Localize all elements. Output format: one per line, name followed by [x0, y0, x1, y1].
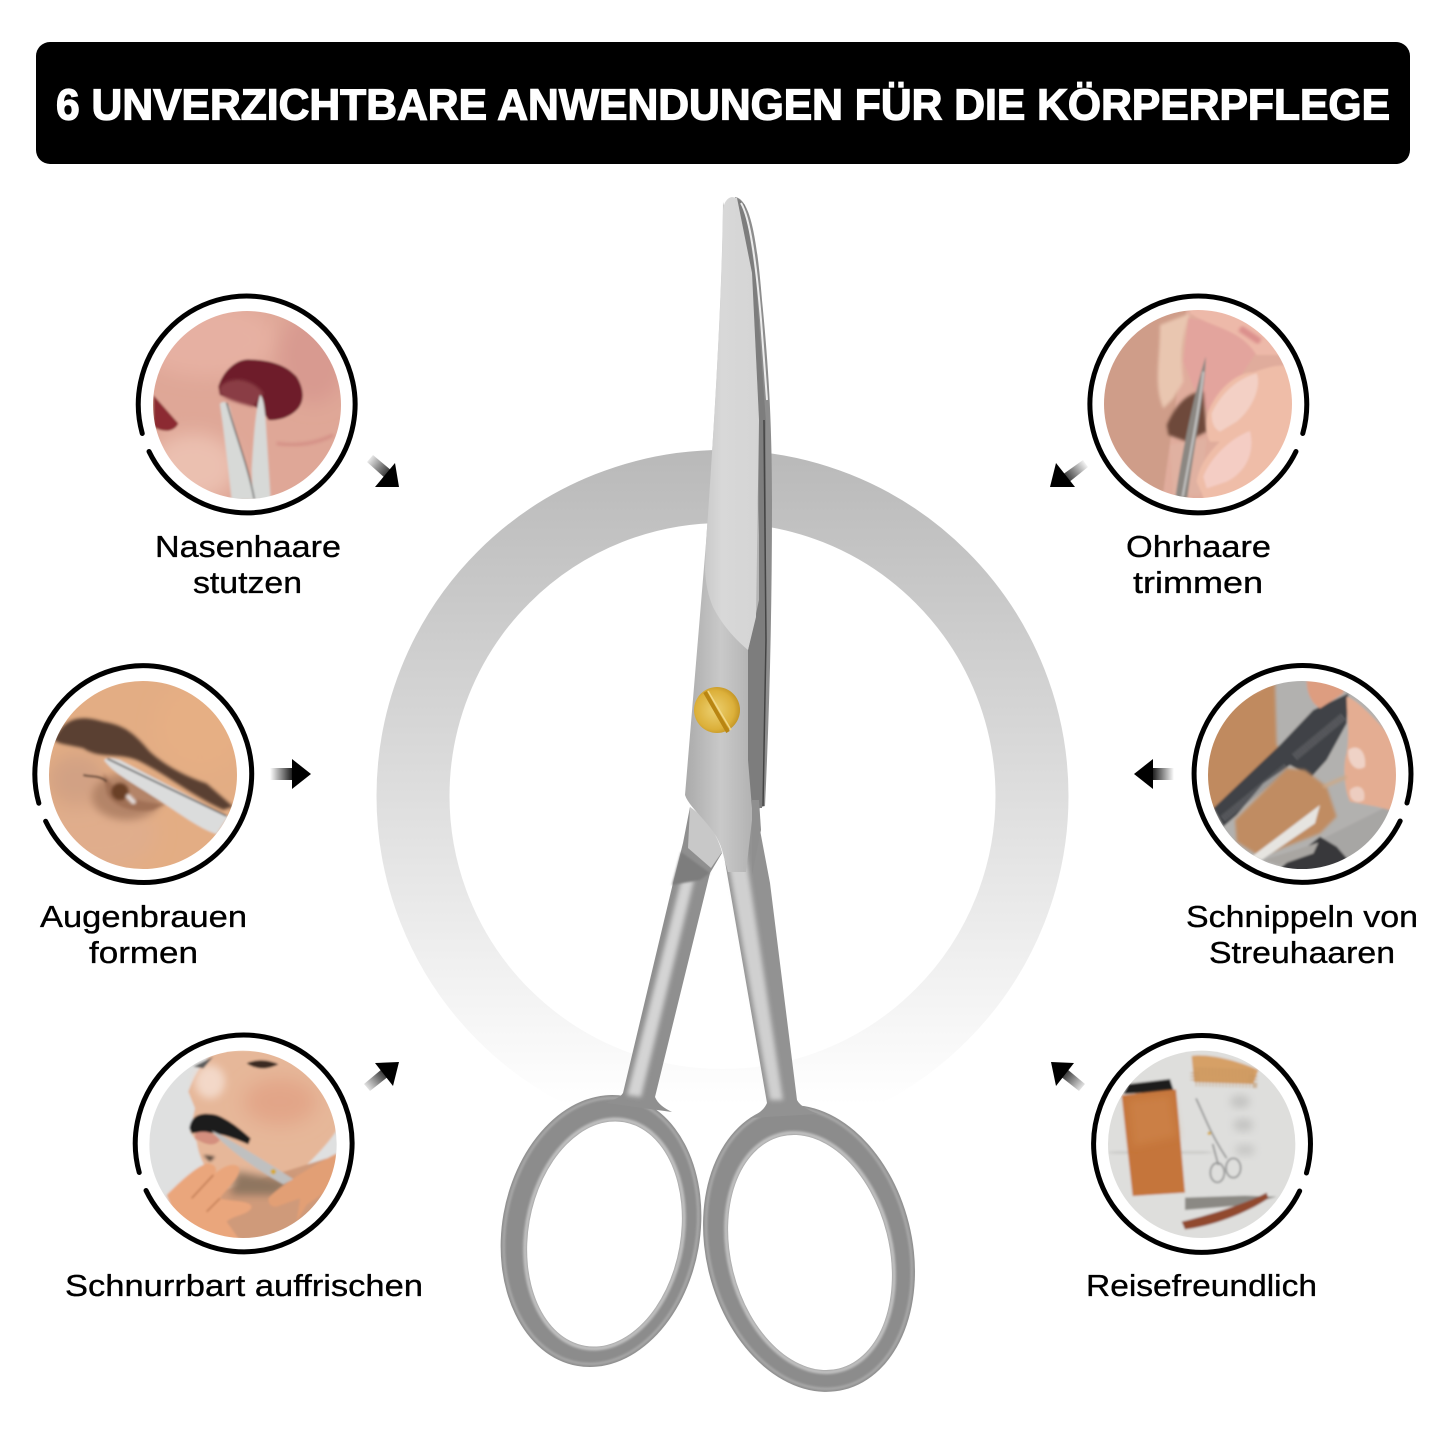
gold screw [694, 687, 740, 733]
label: trimmen [1133, 565, 1263, 600]
hollow-ground blade [705, 197, 759, 650]
wooden comb [1192, 1055, 1258, 1084]
label: Streuhaaren [1209, 935, 1395, 970]
label: Reisefreundlich [1086, 1268, 1317, 1303]
panel: Augenbrauen [35, 666, 311, 970]
right shank [715, 800, 818, 1118]
panel: Schnurrbart auffrischen [65, 1035, 423, 1303]
title text: 6 UNVERZICHTBARE ANWENDUNGEN FÜR DIE KÖRPERPFLEGE [56, 80, 1390, 130]
blade bevel [737, 198, 766, 808]
photo: mustache [148, 1050, 340, 1245]
label [1186, 899, 1418, 970]
small scissors [1196, 1098, 1241, 1182]
razor handle [1182, 1193, 1268, 1229]
left hand [167, 1163, 252, 1245]
scissor blades [1252, 805, 1320, 860]
arrow [1051, 1062, 1085, 1091]
arrow [364, 1062, 399, 1091]
neck [220, 1158, 327, 1245]
photo: nose [153, 311, 341, 499]
pivot body [685, 202, 763, 872]
label: stutzen [193, 565, 302, 600]
comb [1213, 693, 1348, 827]
right handle ring [674, 1082, 944, 1415]
label: formen [89, 935, 198, 970]
panel: Ohrhaare [1050, 296, 1307, 600]
ring [1094, 1035, 1310, 1252]
panel: Reisefreundlich [1051, 1035, 1317, 1303]
title bar [36, 42, 1410, 164]
photo: beard and comb [1208, 681, 1396, 869]
label [1126, 529, 1271, 600]
panel: Schnippeln von Streuhaaren [1134, 665, 1418, 970]
ring [1090, 296, 1307, 513]
label: Ohrhaare [1126, 529, 1271, 564]
upper beard [1208, 684, 1280, 810]
scissor blades [220, 402, 255, 500]
phone [1123, 1079, 1174, 1094]
arrow [1134, 759, 1174, 789]
label: Schnippeln von [1186, 899, 1418, 934]
beard shadow [230, 1172, 293, 1195]
fingers [1307, 680, 1343, 708]
arrow [270, 759, 311, 789]
nostril [218, 359, 303, 420]
photo: eye [49, 681, 237, 869]
ring [1194, 665, 1411, 882]
label [40, 899, 247, 970]
arrow [1050, 460, 1088, 487]
ring [35, 666, 252, 882]
gradient ring behind scissors [413, 486, 1032, 1106]
photo: travel kit [1105, 1048, 1298, 1242]
panel: Nasenhaare [137, 296, 399, 600]
left shank [606, 807, 722, 1112]
scissor blade [104, 758, 228, 834]
scissor blade [1175, 357, 1206, 498]
outer back blade edge [735, 197, 772, 808]
mustache [189, 1114, 251, 1144]
razor blade [1185, 1196, 1277, 1210]
edge highlight and dark line [741, 203, 767, 400]
eye [92, 773, 162, 820]
eyebrow [53, 718, 233, 810]
lower beard [1235, 768, 1337, 857]
arrow [367, 455, 399, 487]
scissor blade [212, 1131, 293, 1184]
label: Nasenhaare [155, 529, 341, 564]
label: Schnurrbart auffrischen [65, 1268, 423, 1303]
ring [135, 1035, 352, 1252]
right hand [268, 1153, 340, 1222]
leather case [1122, 1089, 1185, 1196]
fingers [1197, 365, 1297, 505]
label [155, 529, 341, 600]
scissors product image [480, 197, 944, 1415]
label: Augenbrauen [40, 899, 247, 934]
left handle ring [480, 1079, 722, 1383]
ring [138, 296, 355, 513]
photo: ear [1100, 307, 1297, 505]
